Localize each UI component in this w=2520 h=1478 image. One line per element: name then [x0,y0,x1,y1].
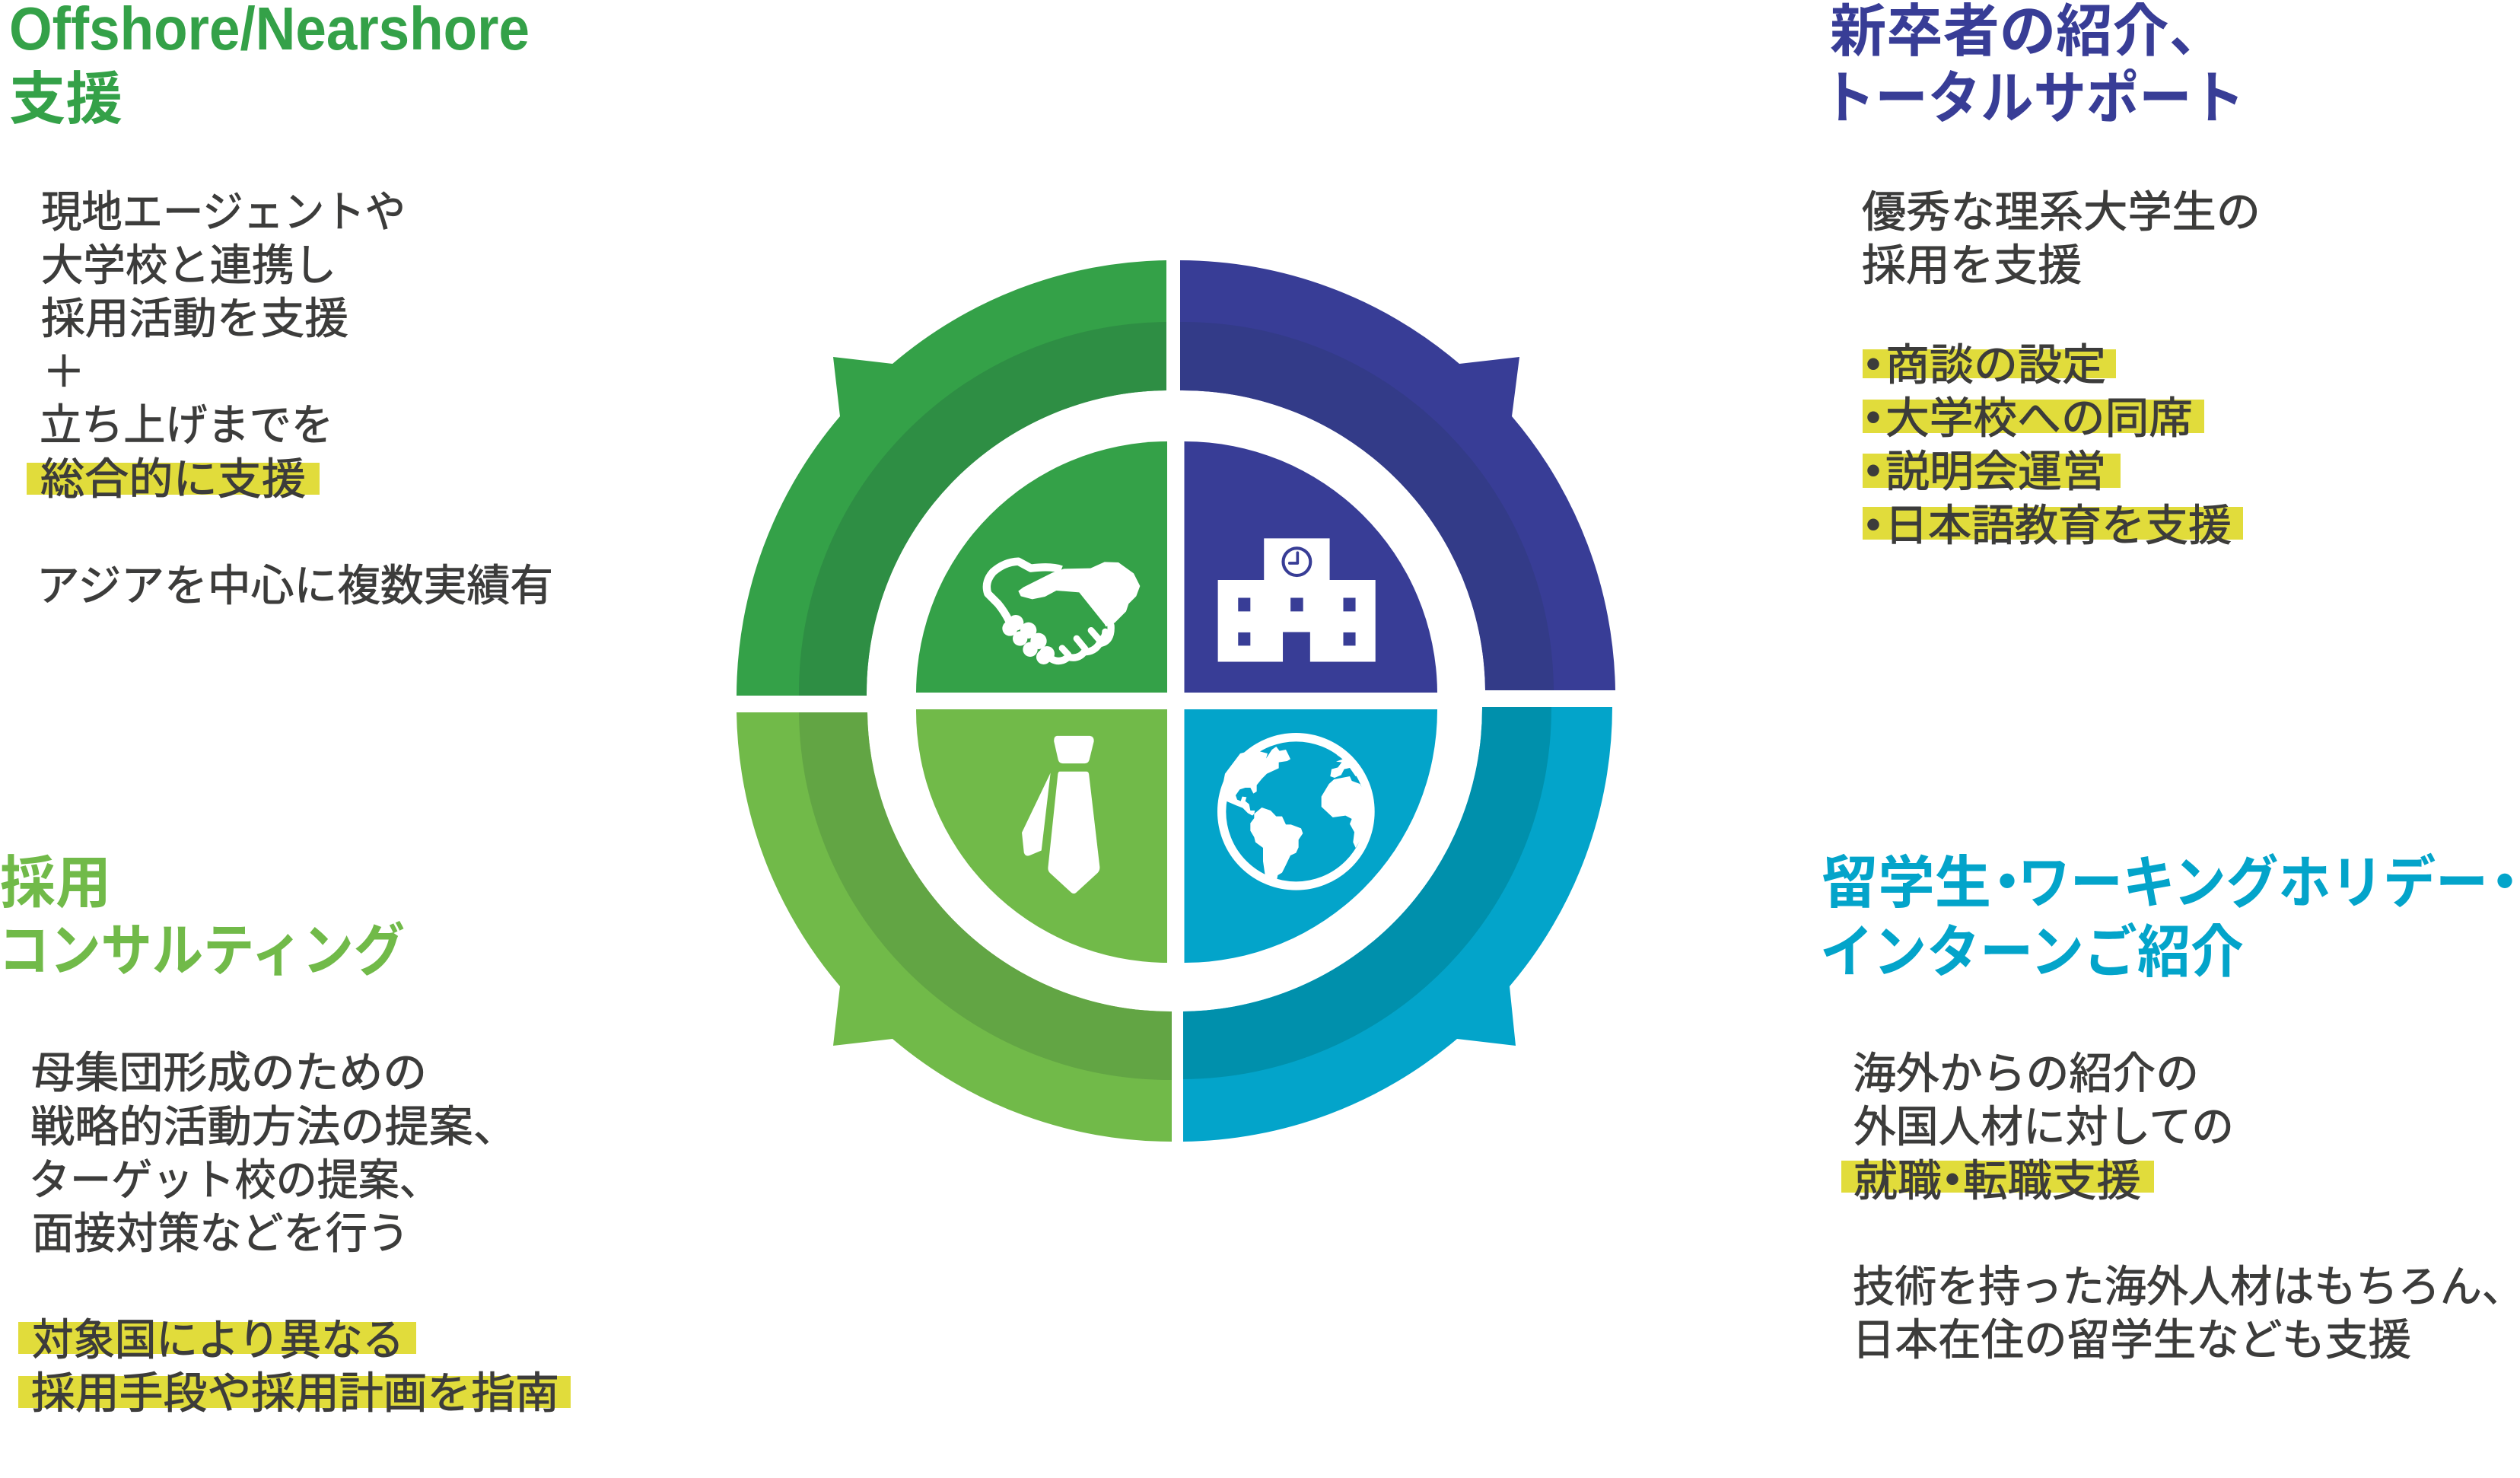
body text: ＋ [43,348,85,397]
body text: 大学校と連携し [41,241,336,290]
body text: 海外からの紹介の [1853,1050,2199,1098]
body text: 対象国により異なる [32,1316,404,1365]
panel: international students, working holiday, interns [1820,851,2520,1365]
body text: 採用を支援 [1862,241,2082,290]
body text: 採用手段や採用計画を指南 [31,1369,559,1418]
body text: 転職支援 [1963,1157,2141,1206]
body text: ・ [1852,342,1895,390]
body text: 大学校への同席 [1885,394,2193,443]
body text: 外国人材に対しての [1853,1103,2234,1152]
body text: 商談の設定 [1885,341,2106,390]
heading: 新卒者の紹介、トータルサポート: 新卒者の紹介、 [1830,0,2226,63]
body text: アジアを中心に複数実績有 [37,562,553,610]
segment: top-right outer arc [1180,260,1615,690]
body text: ・ [1852,448,1895,497]
segment: bottom-left outer arc [737,712,1172,1142]
body text: 日本在住の留学生なども支援 [1852,1316,2411,1365]
heading: 採用コンサルティング: 採用 [0,851,111,915]
body text: 戦略的活動方法の提案、 [30,1103,517,1152]
body text [29,1049,559,1418]
body text: ・ [1931,1157,1974,1206]
body text: ・ [1852,395,1895,444]
body text: 立ち上げまでを [40,401,333,450]
body text [37,188,553,610]
heading: 留学生・ワーキングホリデー・インターンご紹介 [1820,851,2520,984]
body text: ターゲット校の提案、 [29,1156,441,1205]
icon: handshake [987,562,1140,664]
heading: 留学生・ワーキングホリデー・インターンご紹介: インターンご紹介 [1820,920,2244,984]
highlight bar [1841,1161,2154,1193]
segment: bottom-right outer arc [1183,707,1612,1142]
inner quadrant: light green with necktie [916,709,1167,963]
body text: 母集団形成のための [31,1049,427,1097]
inner quadrant: green with handshake [916,441,1167,693]
heading: 留学生・ワーキングホリデー・インターンご紹介: ワーキングホリデー [2018,851,2488,915]
body text [1852,1050,2520,1365]
icon: globe [1220,737,1370,886]
highlight bars [18,1322,571,1408]
body text: 現地エージェントや [41,188,406,237]
body text: 総合的に支援 [40,455,306,504]
heading: 採用コンサルティング [0,851,405,983]
body text: 優秀な理系大学生の [1862,188,2261,237]
panel: Offshore/Nearshore support [9,0,553,610]
heading: 新卒者の紹介、トータルサポート [1822,0,2245,130]
heading: 留学生・ワーキングホリデー・インターンご紹介: 留学生 [1822,851,1991,915]
heading: Offshore/Nearshore 支援: 支援 [9,67,123,131]
body text: 日本語教育を支援 [1885,502,2232,550]
body text: 就職 [1853,1157,1942,1206]
body text [1852,188,2261,551]
body text: 採用活動を支援 [41,295,348,343]
highlight bar [27,463,320,495]
inner quadrant: cyan with globe [1184,709,1437,963]
heading: 新卒者の紹介、トータルサポート: トータルサポート [1822,66,2245,130]
body text: 面接対策などを行う [32,1209,409,1258]
segment: top-left outer arc [737,260,1166,696]
body text: 説明会運営 [1885,448,2106,496]
highlight bars [1863,349,2243,540]
icon: school building [1218,538,1376,662]
heading: 留学生・ワーキングホリデー・インターンご紹介: ・ [1978,851,2036,915]
panel: new graduate introduction and total support [1822,0,2261,551]
icon: necktie [1022,736,1099,893]
inner quadrant: blue with school building [1184,441,1437,693]
body text: ・ [1852,502,1895,551]
panel: recruitment consulting [0,851,571,1418]
heading: 採用コンサルティング: コンサルティング [0,919,405,983]
heading: Offshore/Nearshore 支援 [9,0,530,131]
central ring diagram [737,260,1615,1142]
